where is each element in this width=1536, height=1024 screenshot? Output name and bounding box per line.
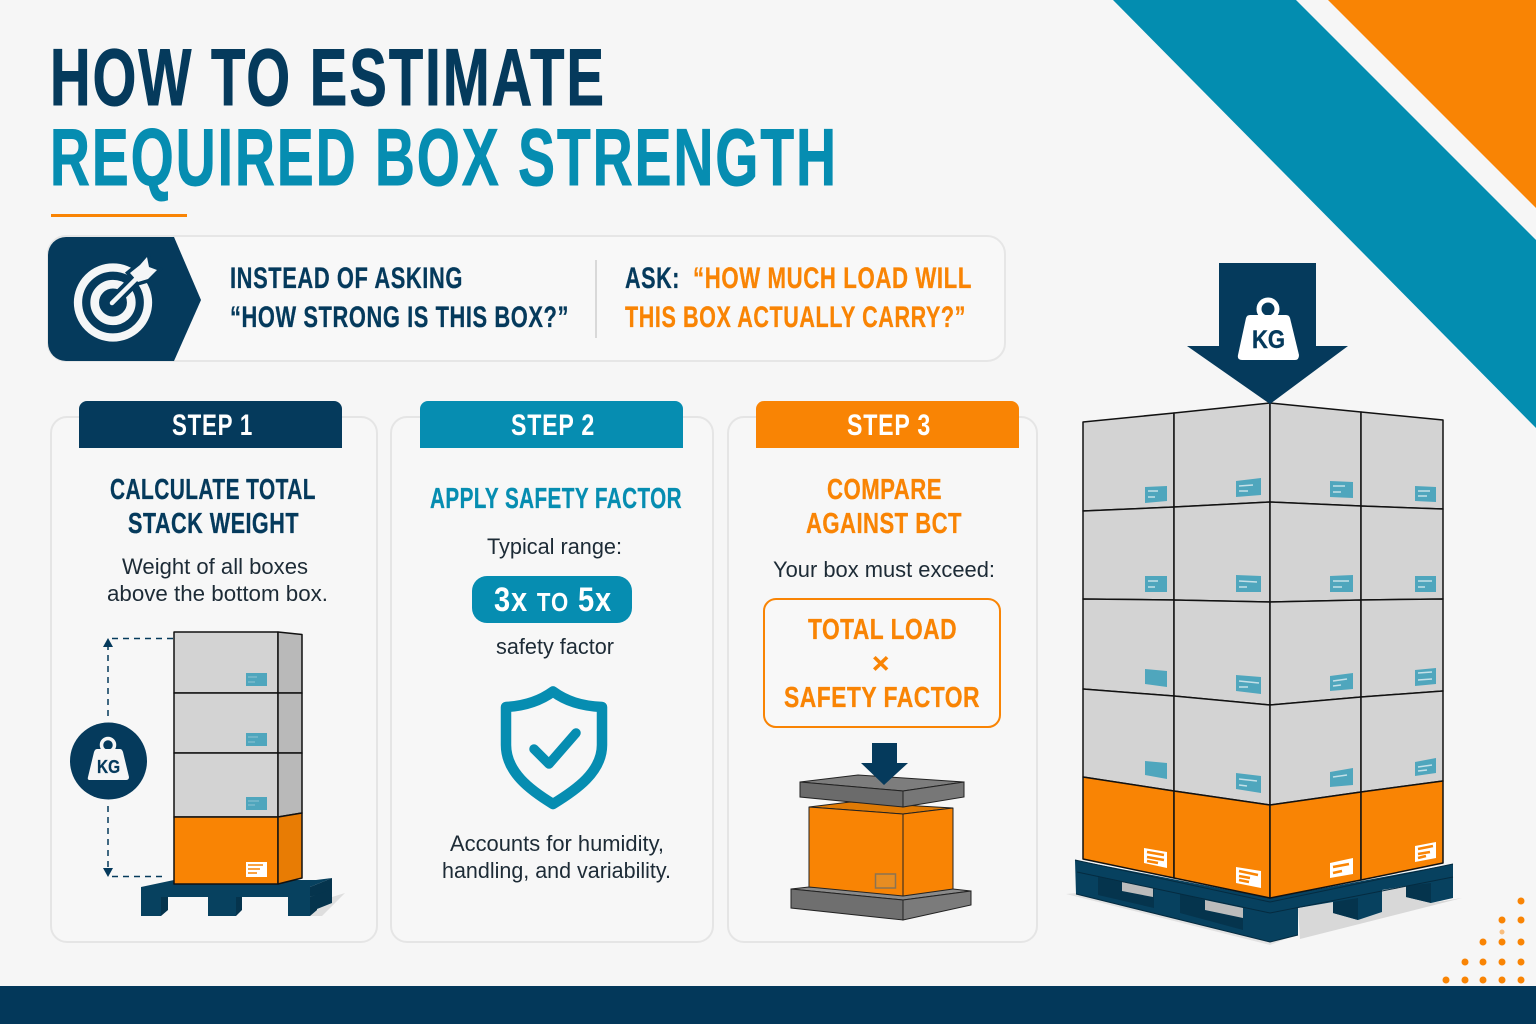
banner left text: “HOW STRONG IS THIS BOX?” (230, 301, 569, 334)
panel: step 3 (728, 401, 1037, 942)
step 2 heading: APPLY SAFETY FACTOR (430, 483, 682, 515)
icon: shield with check (506, 692, 602, 804)
box labels (1145, 478, 1436, 793)
safety factor caption: safety factor (496, 634, 614, 659)
decorative orange dots (1442, 898, 1524, 984)
label text marks (1148, 485, 1432, 786)
step 1 heading (110, 474, 316, 540)
footer bar (0, 986, 1536, 1024)
title: REQUIRED BOX STRENGTH (50, 113, 838, 203)
illustration: loaded pallet stack (1066, 403, 1462, 945)
banner: reframed question (48, 236, 1005, 361)
step 1 description: above the bottom box. (107, 581, 328, 606)
downward load arrow with kg weight (1187, 263, 1348, 404)
orange label text marks (1147, 846, 1433, 882)
top row of boxes (1083, 403, 1443, 511)
title: HOW TO ESTIMATE (50, 33, 606, 123)
panel: step 1 (51, 401, 377, 942)
banner right text: THIS BOX ACTUALLY CARRY?” (625, 301, 966, 334)
banner right text: “HOW MUCH LOAD WILL (693, 262, 972, 295)
step 1 heading: STACK WEIGHT (128, 508, 299, 540)
title underline (51, 214, 187, 217)
banner icon tab: target (48, 237, 201, 361)
typical range label: Typical range: (487, 534, 622, 559)
title (50, 33, 838, 203)
step 2 description: Accounts for humidity, (450, 831, 664, 856)
pallet (1066, 860, 1462, 945)
step 1 header: STEP 1 (172, 409, 253, 442)
orange box labels (1144, 842, 1436, 888)
banner right text: ASK: (625, 262, 680, 295)
step 2 description: handling, and variability. (442, 858, 671, 883)
icon: kg weight (1238, 300, 1299, 360)
step 3 header (756, 401, 1019, 448)
step 3 heading (806, 474, 962, 540)
formula box (764, 599, 1000, 727)
safety factor pill: 3x TO 5x (494, 581, 612, 619)
banner left text (230, 262, 569, 334)
banner right text (625, 262, 972, 334)
step 3 heading: AGAINST BCT (806, 508, 962, 540)
dashed height arrow (103, 638, 174, 877)
second row of boxes (1083, 502, 1443, 602)
step 2 header: STEP 2 (511, 409, 595, 442)
formula box: SAFETY FACTOR (784, 682, 980, 714)
step 2 header (420, 401, 683, 448)
bottom orange row of boxes (1083, 777, 1443, 898)
step 2 description (442, 831, 671, 883)
icon: kg weight badge: KG (97, 757, 120, 777)
icon: kg weight badge (70, 722, 147, 800)
step 1 description (107, 554, 328, 606)
illustration: box compression test (791, 743, 971, 920)
fourth row of boxes (1083, 689, 1443, 805)
illustration: pallet (141, 878, 345, 916)
third row of boxes (1083, 599, 1443, 705)
step 3 heading: COMPARE (827, 474, 942, 506)
step 1 description: Weight of all boxes (122, 554, 308, 579)
step 3 header: STEP 3 (847, 409, 931, 442)
icon: kg weight: KG (1252, 326, 1285, 354)
step 3 description: Your box must exceed: (773, 557, 995, 582)
banner left text: INSTEAD OF ASKING (230, 262, 463, 295)
step 1 heading: CALCULATE TOTAL (110, 474, 316, 506)
panel: step 2 (391, 401, 713, 942)
illustration: stacked boxes (174, 632, 302, 884)
step 1 header (79, 401, 342, 448)
formula box: × (872, 648, 890, 680)
safety factor pill (472, 576, 632, 623)
corner decoration: teal and orange diagonal bands (1113, 0, 1536, 428)
formula box: TOTAL LOAD (808, 614, 957, 646)
